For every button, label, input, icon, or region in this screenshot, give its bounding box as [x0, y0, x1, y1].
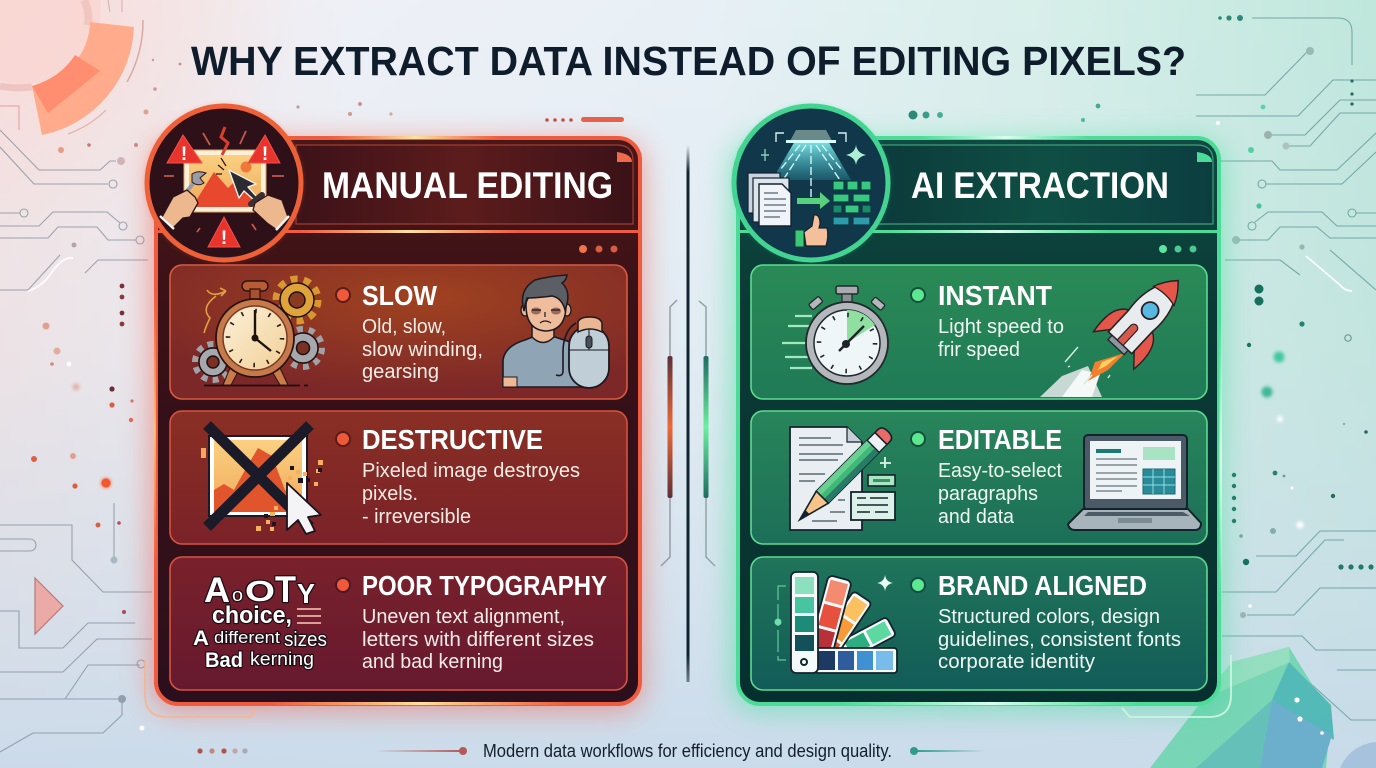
icon: laptop [1068, 435, 1201, 530]
description: instant: Light speed to [938, 316, 1064, 338]
description: brand aligned: Structured colors, design [938, 606, 1160, 628]
icon: bad typography sample: A [193, 627, 209, 650]
footer caption: Modern data workflows for efficiency and design quality. [483, 741, 892, 761]
heading: manual editing: MANUAL EDITING [322, 165, 613, 206]
decoration: white highlight left [28, 258, 73, 291]
icon: colour swatches [774, 572, 897, 673]
label: editable: EDITABLE [938, 424, 1062, 455]
decoration: top-left radial wedge [0, 0, 143, 135]
description: brand aligned: guidelines, consistent fonts [938, 629, 1181, 651]
panel body [156, 138, 640, 704]
icon: crossed out pixelated image [201, 425, 323, 534]
bottom bracket [145, 660, 256, 717]
label: slow: SLOW [362, 280, 437, 311]
icon: tired person with mouse [503, 275, 609, 388]
left hand with wrench [160, 172, 206, 229]
right hand [251, 195, 289, 230]
decoration: top bar and dots [545, 117, 624, 122]
center divider [661, 145, 715, 682]
row: instant [751, 261, 1207, 399]
row: slow [170, 265, 627, 399]
panel edge highlights [840, 136, 1222, 705]
decoration dots left [31, 59, 393, 731]
indicator dots [1159, 245, 1196, 253]
description: slow [362, 316, 483, 383]
bottom bracket [1122, 655, 1231, 717]
description: editable: and data [938, 506, 1015, 528]
label: brand aligned: BRAND ALIGNED [938, 570, 1147, 601]
icon: bad typography sample: Y [297, 578, 315, 609]
description: poor typography: Uneven text alignment, [362, 606, 565, 628]
footer line right [910, 747, 985, 755]
row: editable [751, 411, 1207, 544]
description: editable: Easy-to-select [938, 460, 1062, 482]
bullet [336, 288, 350, 302]
icon: bad typography sample: A [204, 571, 230, 610]
emblem: manual editing [146, 105, 302, 261]
circuit lines right [1196, 18, 1376, 720]
description: destructive: pixels. [362, 483, 418, 505]
bullet [911, 432, 925, 446]
title: WHY EXTRACT DATA INSTEAD OF EDITING PIXELS? [191, 38, 1186, 84]
panel body [738, 138, 1219, 704]
row: poor typography [170, 557, 627, 690]
icon: bad typography sample: kerning [250, 649, 314, 669]
footer dots [197, 748, 248, 754]
footer [197, 741, 985, 761]
heading: ai extraction: AI EXTRACTION [911, 165, 1169, 206]
panel glow [730, 140, 1224, 712]
icon: document and pencil [790, 425, 895, 530]
description: poor typography [362, 606, 594, 673]
row: destructive [170, 411, 627, 544]
label: destructive: DESTRUCTIVE [362, 424, 543, 455]
icon: clock with gears [195, 279, 322, 386]
bullet [911, 578, 925, 592]
decoration dots right [908, 15, 1374, 608]
decoration: white highlight right [1306, 256, 1352, 291]
description: editable: paragraphs [938, 483, 1038, 505]
icon: bad typography sample: O [245, 576, 275, 608]
icon: bad typography sample: different [214, 628, 280, 647]
description: instant [938, 316, 1064, 361]
row: brand aligned [751, 557, 1207, 690]
header bar [157, 145, 638, 233]
icon: bad typography sample: Bad [205, 649, 243, 672]
description: instant: frir speed [938, 339, 1020, 361]
icon: bad typography sample: T [275, 569, 296, 610]
icon: rocket [1040, 261, 1199, 397]
icon: bad typography sample: sizes [284, 629, 327, 651]
emblem: manual editing: ! [262, 144, 268, 165]
description: destructive: Pixeled image destroyes [362, 460, 580, 482]
description: destructive [362, 460, 580, 528]
decoration: triangle [35, 578, 63, 634]
icon: bad typography sample: o [232, 585, 243, 605]
description: editable [938, 460, 1062, 528]
label: instant: INSTANT [938, 280, 1052, 311]
emblem: ai extraction [733, 105, 889, 261]
description: slow: gearsing [362, 361, 439, 383]
bullet [336, 578, 350, 592]
panel: ai extraction [730, 105, 1231, 717]
decoration: bottom-right polygon [1150, 647, 1376, 768]
bullet [911, 288, 925, 302]
header bar [739, 145, 1218, 233]
label: poor typography: POOR TYPOGRAPHY [362, 570, 607, 601]
description: slow: Old, slow, [362, 316, 446, 338]
description: poor typography: and bad kerning [362, 651, 503, 673]
panel glow [150, 140, 644, 712]
description: brand aligned: corporate identity [938, 651, 1095, 673]
description: slow: slow winding, [362, 339, 483, 361]
emblem: manual editing: ! [221, 228, 227, 249]
description: poor typography: letters with different sizes [362, 629, 594, 651]
indicator dots [579, 245, 618, 253]
panel: manual editing [145, 105, 644, 717]
footer line left [375, 747, 467, 755]
icon: bad typography sample: choice, [212, 602, 292, 629]
description: destructive: - irreversible [362, 506, 471, 528]
emblem: manual editing: ! [181, 144, 187, 165]
description: brand aligned [938, 606, 1181, 673]
icon: stopwatch [782, 286, 888, 384]
panel edge highlights [154, 136, 570, 705]
icon: bad typography sample [193, 569, 327, 672]
bullet [336, 432, 350, 446]
circuit lines left [0, 130, 152, 752]
